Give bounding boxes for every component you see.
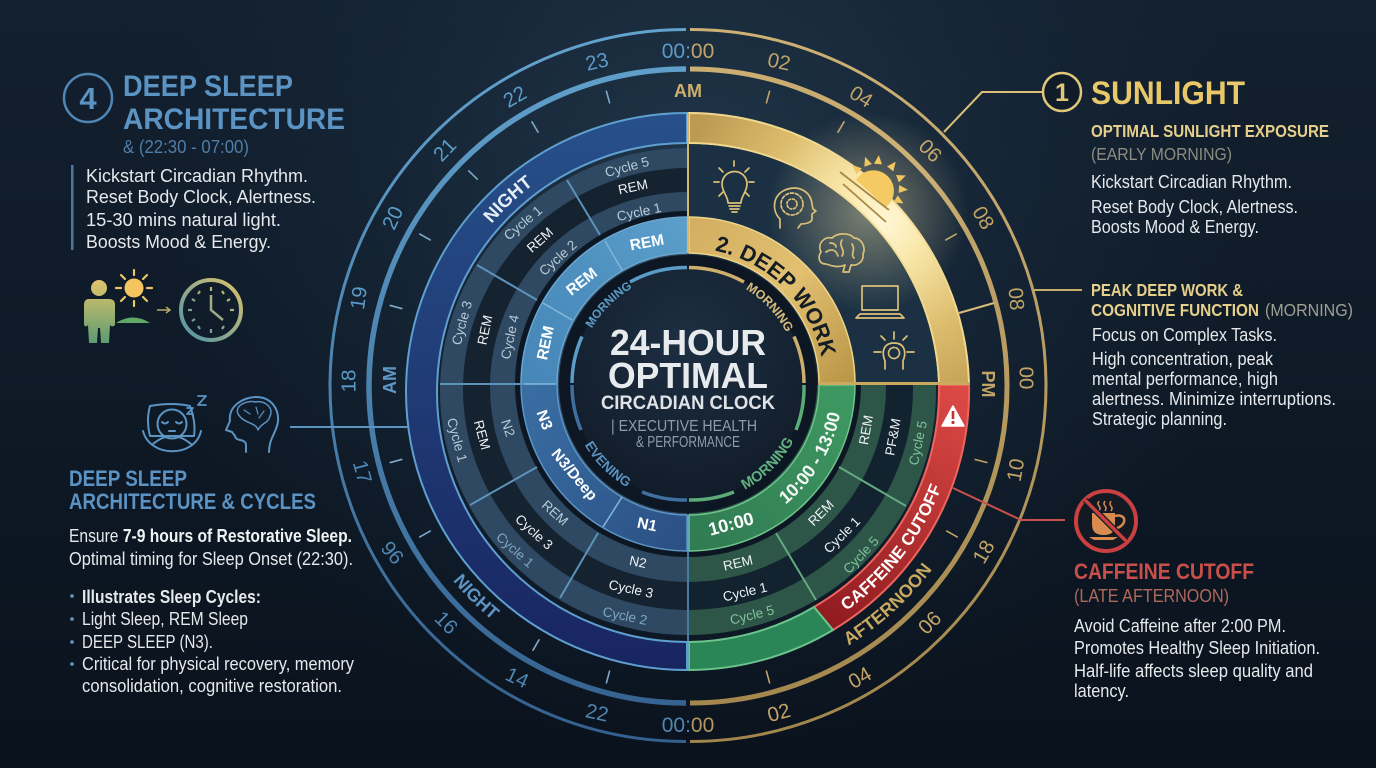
cycle dividers (440, 180, 906, 600)
title: center clock text: & PERFORMANCE (636, 434, 740, 451)
heading: ARCHITECTURE (123, 103, 345, 136)
subheading: OPTIMAL SUNLIGHT EXPOSURE (1091, 121, 1329, 141)
body text (1091, 172, 1298, 237)
clock dial (290, 28, 1082, 743)
band labels: 10:00 - 13:00 (780, 412, 840, 504)
bottom-left cycle labels: REM (539, 497, 571, 529)
icon: sleeping brain head (226, 397, 278, 452)
body text: Boosts Mood & Energy. (86, 232, 271, 252)
heading: PEAK DEEP WORK & (1091, 280, 1243, 300)
body text: Avoid Caffeine after 2:00 PM. (1074, 616, 1286, 636)
afternoon green band (689, 607, 833, 670)
icon: head with brain (775, 188, 816, 228)
icon: warning triangle (942, 406, 964, 426)
bottom-left cycle labels: REM (471, 419, 493, 451)
inner band: morning green (689, 385, 855, 551)
inner arc labels: MORNING (740, 438, 792, 490)
body text: Promotes Healthy Sleep Initiation. (1074, 638, 1320, 658)
body text: Focus on Complex Tasks. (1092, 325, 1277, 345)
night hour labels: 18 (338, 370, 360, 392)
body text: Half-life affects sleep quality and (1074, 661, 1313, 681)
body text: alertness. Minimize interruptions. (1092, 389, 1336, 409)
bottom-right cycle labels (706, 414, 930, 628)
night hour labels: 22 (583, 699, 611, 727)
bottom-left cycle labels: N2 (628, 553, 648, 571)
band labels: AFTERNOON (846, 562, 932, 646)
icon: laptop (856, 286, 904, 318)
bottom-right cycle labels: PF&M (882, 417, 904, 457)
night hour labels: 22 (499, 81, 531, 113)
heading: SUNLIGHT (1091, 75, 1245, 111)
AM label: AM (674, 81, 702, 101)
body text: Strategic planning. (1092, 409, 1227, 429)
intro text (69, 526, 353, 569)
top-left cycle labels: REM (617, 177, 649, 197)
bullet list: DEEP SLEEP (N3). (82, 632, 213, 652)
icon: person in sunlight (84, 270, 152, 343)
inner band: rem (521, 217, 687, 384)
number badge 4 (64, 74, 112, 122)
heading (1091, 280, 1353, 320)
bottom-right cycle labels: Cycle 5 (728, 602, 776, 628)
bottom-left cycle labels: Cycle 1 (493, 529, 537, 571)
top-left cycle labels (449, 154, 665, 362)
night hour labels: AM (380, 366, 400, 394)
bottom-left cycle labels: Cycle 3 (512, 511, 556, 553)
bottom-right cycle labels: REM (856, 414, 876, 446)
inner band dividers (524, 241, 622, 527)
bottom-left cycle labels: N3/Deep (548, 446, 600, 504)
bottom-right cycle labels: 10:00 (706, 508, 756, 540)
bottom-left cycle labels: Cycle 3 (607, 577, 655, 601)
body text: mental performance, high (1092, 369, 1278, 389)
band labels: NIGHT (454, 574, 500, 618)
bottom-right cycle labels: REM (722, 552, 754, 574)
number badge 4: 4 (79, 81, 97, 116)
inner arc labels (585, 282, 792, 490)
midnight labels top and bottom: 00:00 (662, 40, 714, 62)
day hour labels: 10 (1003, 457, 1029, 483)
night hour labels: 17 (348, 458, 376, 486)
night hour labels: 19 (346, 285, 372, 311)
day hour labels: 04 (845, 81, 877, 113)
bottom-right cycle labels: REM (805, 497, 837, 529)
subheading: (LATE AFTERNOON) (1074, 585, 1229, 606)
panel: caffeine cutoff (1074, 491, 1320, 701)
band labels: CAFFEINE CUTOFF (842, 483, 939, 609)
horizontal gold seam (819, 382, 970, 385)
bottom-left cycle labels: N2 (498, 417, 518, 439)
night hour labels: 96 (376, 537, 408, 569)
title: center clock text: CIRCADIAN CLOCK (601, 392, 775, 414)
outer ring (330, 30, 1046, 742)
night hour labels: 21 (429, 134, 461, 166)
night hour labels: 20 (378, 203, 408, 233)
inner arcs (572, 267, 804, 500)
body text: High concentration, peak (1092, 349, 1274, 369)
caffeine cutoff band (814, 385, 969, 630)
bottom-left cycle labels (444, 408, 659, 628)
title: center clock text: OPTIMAL (608, 355, 768, 396)
top-left cycle labels: REM (563, 265, 601, 299)
top-left cycle labels: Cycle 1 (501, 203, 545, 243)
icon: focused head (874, 332, 914, 369)
vertical seam (687, 113, 689, 253)
day hour labels: 04 (844, 662, 876, 694)
icon: sun on band (840, 155, 908, 222)
time range: & (22:30 - 07:00) (123, 137, 249, 157)
icon: clock (181, 280, 241, 340)
body text: latency. (1074, 681, 1129, 701)
inner arc labels: MORNING (585, 282, 631, 328)
body text: Boosts Mood & Energy. (1091, 217, 1259, 237)
night hour labels: 16 (430, 607, 462, 639)
side bar (71, 165, 74, 250)
day hour labels: 02 (765, 699, 793, 727)
icon: sleeping face (143, 396, 206, 451)
panel: deep sleep architecture header (64, 70, 345, 343)
bottom-left cycle labels: Cycle 1 (444, 416, 470, 464)
center core (559, 255, 817, 513)
day hour labels: 00 (1014, 367, 1038, 389)
bottom-right cycle labels: Cycle 1 (721, 580, 769, 604)
band labels (454, 174, 939, 646)
band labels: 2. DEEP WORK (715, 236, 836, 357)
intro text: Ensure 7-9 hours of Restorative Sleep. (69, 526, 352, 546)
heading: DEEP SLEEP (69, 466, 187, 491)
top-left cycle labels: REM (629, 232, 665, 254)
caffeine period cycles block (689, 385, 936, 635)
title: center clock text: | EXECUTIVE HEALTH (611, 418, 757, 435)
top-left cycle labels: REM (475, 314, 495, 346)
bottom-left cycle labels: N3 (533, 408, 556, 433)
body text: Reset Body Clock, Alertness. (86, 187, 316, 207)
day hour labels (765, 48, 1038, 727)
title: center clock text: 24-HOUR (610, 322, 766, 363)
night hour labels (338, 48, 611, 727)
inner arc labels: EVENING (585, 440, 630, 486)
heading (69, 466, 316, 514)
panel: deep sleep cycles (69, 396, 354, 696)
title: center clock text (601, 322, 775, 451)
bottom-right cycle labels: Cycle 5 (906, 419, 930, 467)
body text (86, 166, 316, 252)
heading: ARCHITECTURE & CYCLES (69, 489, 316, 514)
band labels: NIGHT (482, 174, 530, 223)
callouts (290, 92, 1082, 520)
bullet list (70, 587, 354, 696)
lower vertical seam (687, 515, 689, 670)
top-left cycle labels: Cycle 3 (449, 299, 475, 347)
hour tick marks (390, 91, 987, 683)
top-left cycle labels: REM (534, 324, 558, 362)
bottom-left cycle labels: Cycle 2 (601, 604, 649, 628)
bullet list: Illustrates Sleep Cycles: (82, 587, 261, 607)
top-left cycle labels: Cycle 2 (536, 237, 580, 279)
sunlight band (689, 113, 969, 384)
day hour labels: 06 (914, 607, 946, 639)
inner band: n3 (521, 384, 687, 551)
top-left cycle labels: Cycle 1 (615, 200, 663, 224)
body text: Kickstart Circadian Rhythm. (1091, 172, 1292, 192)
top-left cycle labels: Cycle 5 (603, 154, 651, 180)
day hour labels: 08 (967, 202, 999, 234)
gold band divider (959, 303, 994, 313)
heading: CAFFEINE CUTOFF (1074, 559, 1254, 584)
day hour labels: 08 (1004, 287, 1028, 311)
dark gap rings (518, 214, 858, 554)
heading (123, 70, 345, 136)
body text (1092, 325, 1336, 429)
top-left cycle labels: Cycle 4 (498, 313, 522, 361)
heading: COGNITIVE FUNCTION (1091, 300, 1259, 320)
arrow (157, 307, 170, 313)
panel: sunlight (1043, 73, 1329, 237)
panel: peak deep work (1091, 280, 1353, 429)
midnight labels top and bottom (662, 40, 714, 736)
top right panel tone (689, 144, 938, 383)
number badge 1: 1 (1055, 79, 1069, 107)
bullet list: consolidation, cognitive restoration. (82, 676, 342, 696)
body text: Reset Body Clock, Alertness. (1091, 197, 1298, 217)
icon: lightbulb (714, 161, 754, 212)
day hour labels: 02 (765, 48, 793, 76)
bottom-right cycle labels: Cycle 5 (840, 533, 882, 577)
midnight labels top and bottom: 00:00 (662, 714, 714, 736)
icon: brain (819, 234, 864, 272)
center disk (572, 268, 804, 500)
second ring (369, 69, 1007, 703)
day hour labels: 06 (914, 135, 946, 167)
bottom-right cycle labels: Cycle 1 (821, 514, 863, 556)
day hour labels: 18 (968, 536, 1000, 568)
heading: (MORNING) (1265, 300, 1353, 320)
body text (1074, 616, 1320, 701)
inner arc labels: MORNING (746, 282, 792, 332)
heading: DEEP SLEEP (123, 70, 293, 103)
day hour labels: PM (978, 370, 998, 398)
number badge 1 (1043, 73, 1081, 111)
subheading (1091, 121, 1329, 164)
inner band: deep work (689, 217, 855, 384)
night hour labels: 14 (502, 663, 532, 693)
top-left cycle labels: REM (524, 224, 556, 256)
body text: Kickstart Circadian Rhythm. (86, 166, 308, 186)
bullet list: Critical for physical recovery, memory (82, 654, 354, 674)
sleep cycles block (440, 148, 687, 635)
intro text: Optimal timing for Sleep Onset (22:30). (69, 549, 353, 569)
night band (406, 113, 687, 670)
bullet list: Light Sleep, REM Sleep (82, 609, 248, 629)
night hour labels: 23 (583, 48, 611, 76)
subheading: (EARLY MORNING) (1091, 144, 1232, 164)
body text: 15-30 mins natural light. (86, 210, 281, 230)
icon: no coffee (1076, 491, 1136, 551)
bottom-left cycle labels: N1 (636, 515, 659, 535)
sunlight glow (768, 112, 968, 312)
